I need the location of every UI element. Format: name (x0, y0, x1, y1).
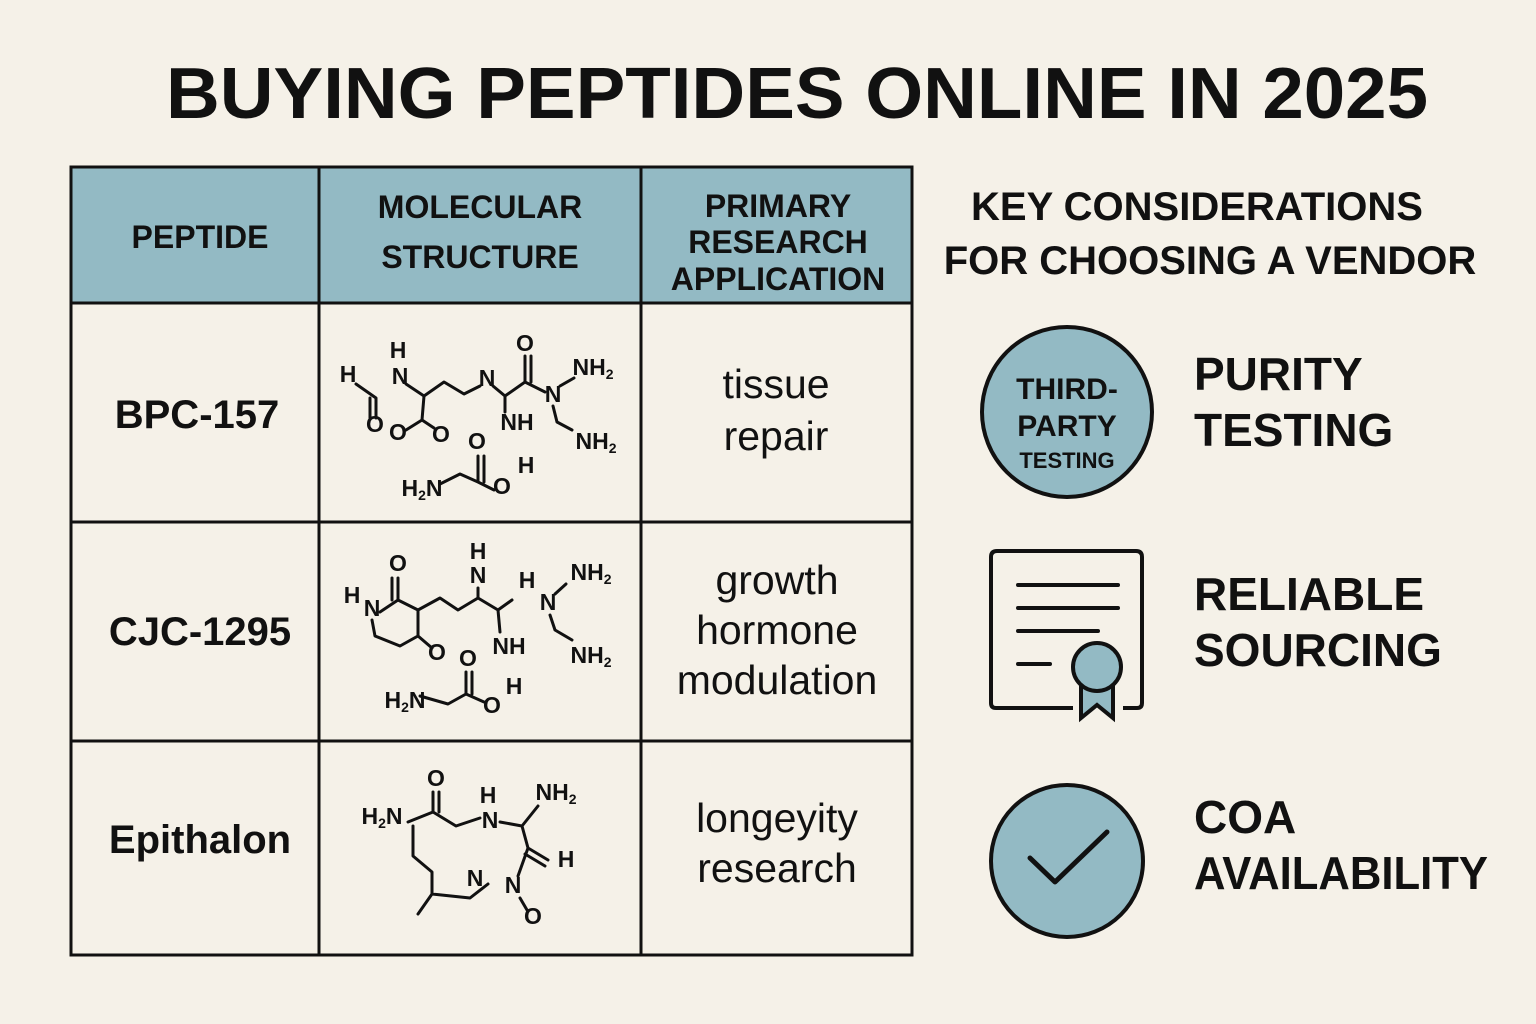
structure: CJC-1295: NH (492, 633, 526, 659)
structure: BPC-157: 2 (418, 487, 426, 503)
structure: BPC-157: NH (500, 409, 534, 435)
structure: CJC-1295: H (470, 538, 486, 564)
title: BUYING PEPTIDES ONLINE IN 2025 (166, 54, 1428, 134)
application: longevity research: longeyity (696, 795, 858, 841)
structure: BPC-157: 2 (609, 440, 617, 456)
label: reliable sourcing: SOURCING (1194, 624, 1442, 676)
label: COA availability: COA (1194, 791, 1296, 843)
header: primary research application: RESEARCH (688, 224, 868, 260)
label: COA availability: AVAILABILITY (1194, 847, 1488, 899)
label: purity testing: PURITY (1194, 348, 1363, 400)
structure: CJC-1295: 2 (604, 571, 612, 587)
structure: CJC-1295: H (344, 582, 360, 608)
structure: Epithalon: NH (535, 779, 569, 805)
heading: key considerations: KEY CONSIDERATIONS (971, 185, 1423, 229)
application: longevity research: research (697, 845, 857, 891)
structure: Epithalon: N (482, 807, 498, 833)
structure: Epithalon: H (480, 782, 496, 808)
structure: CJC-1295 (344, 538, 612, 718)
structure: Epithalon: N (386, 803, 403, 829)
structure: Epithalon: H (558, 846, 574, 872)
structure: CJC-1295: H (519, 567, 535, 593)
structure: CJC-1295: 2 (604, 654, 612, 670)
structure: CJC-1295: N (364, 595, 380, 621)
structure: Epithalon: N (467, 865, 483, 891)
icon: third-party testing badge: TESTING (1019, 448, 1115, 473)
application: growth hormone modulation: hormone (696, 607, 858, 653)
header: primary research application: PRIMARY (705, 188, 851, 224)
header: primary research application: APPLICATION (671, 261, 885, 297)
structure: BPC-157: N (392, 363, 408, 389)
structure: Epithalon: O (524, 903, 542, 929)
row label: BPC-157: BPC-157 (115, 393, 279, 437)
structure: Epithalon: 2 (569, 791, 577, 807)
structure: BPC-157 (340, 330, 617, 503)
structure: BPC-157: H (401, 475, 418, 501)
header: peptide: PEPTIDE (132, 219, 268, 255)
structure: BPC-157: H (518, 452, 534, 478)
structure: Epithalon: H (361, 803, 378, 829)
structure: CJC-1295: H (384, 687, 401, 713)
icon: third-party testing badge (982, 327, 1152, 497)
structure: CJC-1295: O (389, 550, 407, 576)
header: molecular structure: STRUCTURE (381, 239, 579, 275)
structure: CJC-1295: N (540, 589, 556, 615)
structure: BPC-157: N (545, 381, 561, 407)
structure: BPC-157: O (432, 421, 450, 447)
structure: CJC-1295: N (470, 562, 486, 588)
application: growth hormone modulation: modulation (677, 657, 877, 703)
icon: checkmark circle (991, 785, 1143, 937)
heading: key considerations: FOR CHOOSING A VENDOR (944, 239, 1476, 283)
icon: certificate (991, 551, 1142, 718)
structure: CJC-1295: O (459, 645, 477, 671)
structure: BPC-157: O (366, 411, 384, 437)
header: molecular structure: MOLECULAR (378, 189, 582, 225)
structure: CJC-1295: N (409, 687, 426, 713)
structure: BPC-157: O (493, 473, 511, 499)
structure: BPC-157: NH (575, 428, 609, 454)
application: tissue repair: tissue (722, 361, 830, 407)
structure: Epithalon: O (427, 765, 445, 791)
structure: Epithalon: 2 (378, 815, 386, 831)
structure: BPC-157: N (426, 475, 443, 501)
icon: third-party testing badge: PARTY (1017, 410, 1117, 443)
structure: CJC-1295: NH (570, 642, 604, 668)
icon: third-party testing badge: THIRD- (1016, 373, 1118, 406)
structure: Epithalon: N (505, 872, 521, 898)
structure: BPC-157: O (516, 330, 534, 356)
structure: BPC-157: H (340, 361, 356, 387)
structure: BPC-157: O (389, 419, 407, 445)
structure: CJC-1295: O (483, 692, 501, 718)
row label: Epithalon: Epithalon (109, 818, 291, 862)
structure: Epithalon (361, 765, 577, 929)
structure: CJC-1295: 2 (401, 699, 409, 715)
label: reliable sourcing: RELIABLE (1194, 568, 1424, 620)
structure: CJC-1295: NH (570, 559, 604, 585)
application: growth hormone modulation: growth (715, 557, 839, 603)
table header row (71, 167, 912, 303)
application: tissue repair: repair (724, 413, 828, 459)
row label: CJC-1295: CJC-1295 (109, 610, 291, 654)
structure: BPC-157: N (479, 365, 495, 391)
label: purity testing: TESTING (1194, 404, 1393, 456)
table (71, 167, 912, 955)
structure: BPC-157: H (390, 337, 406, 363)
structure: CJC-1295: H (506, 673, 522, 699)
structure: BPC-157: O (468, 428, 486, 454)
structure: CJC-1295: O (428, 639, 446, 665)
structure: BPC-157: 2 (606, 366, 614, 382)
structure: BPC-157: NH (572, 354, 606, 380)
